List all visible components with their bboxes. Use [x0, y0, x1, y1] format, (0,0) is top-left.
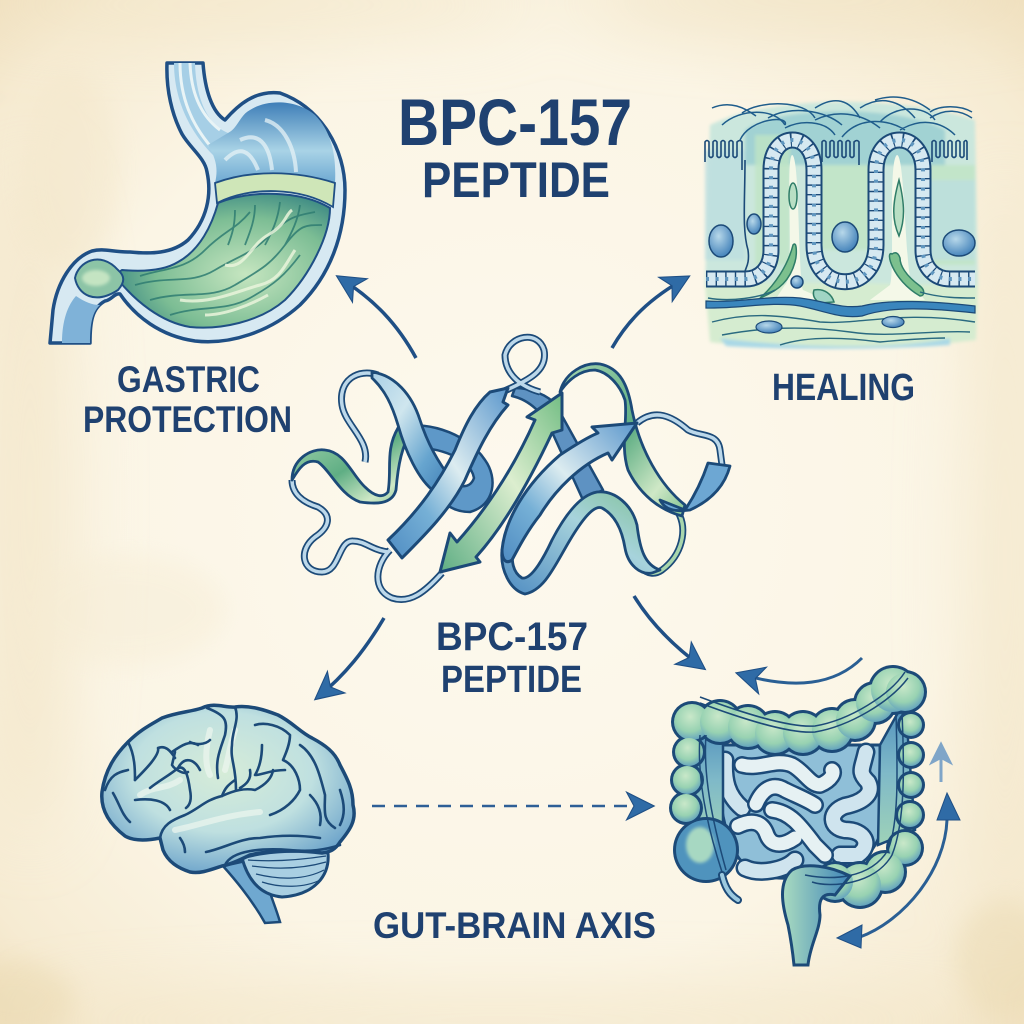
arrow: to stomach — [340, 278, 416, 358]
arrow: top of gut — [740, 658, 862, 683]
strand 2 green arrow — [440, 393, 562, 572]
green top ribbon — [560, 364, 685, 516]
arrow: double-headed right side of gut — [860, 820, 947, 937]
highlights — [140, 730, 260, 830]
upper chamber — [208, 102, 335, 183]
strand 3 blue arrow — [502, 423, 637, 562]
arrow: to gut — [634, 596, 702, 667]
label: gastric protection: PROTECTION — [83, 399, 292, 440]
loops — [292, 337, 722, 600]
strand 1 blue — [388, 388, 508, 558]
sulci — [105, 707, 344, 865]
icon: healing tissue — [705, 97, 978, 349]
crypt cell band — [706, 140, 975, 282]
back blue strand — [512, 388, 603, 500]
title: PEPTIDE — [422, 152, 610, 208]
icon: peptide ribbon — [292, 337, 730, 600]
lower ribbon — [502, 492, 660, 594]
descending inner wall — [878, 700, 915, 845]
label: gut-brain axis: GUT-BRAIN AXIS — [373, 905, 656, 946]
connective fibres — [708, 290, 975, 345]
green capillaries — [760, 180, 924, 303]
arrowhead: up — [937, 793, 960, 820]
microvilli — [705, 140, 967, 272]
arrowhead: down-left — [837, 925, 862, 948]
label: bpc-157 peptide center: BPC-157 — [436, 615, 588, 659]
icon: intestines — [669, 665, 927, 965]
band — [215, 173, 335, 207]
pyloric bulge — [75, 260, 123, 297]
arrow: pale upward — [940, 745, 942, 782]
left blue helix — [372, 372, 452, 492]
colon outline circles — [669, 665, 927, 909]
label: healing: HEALING — [772, 367, 915, 409]
top domes — [712, 97, 972, 140]
ascending inner wall — [690, 720, 723, 840]
duodenum shading — [62, 296, 100, 343]
back ring — [398, 425, 493, 512]
stomach outer wall — [50, 63, 345, 343]
arrow: to healing — [612, 278, 686, 348]
icon: brain — [102, 705, 354, 923]
esophagus shading — [174, 63, 228, 155]
label: gastric protection: GASTRIC — [117, 359, 260, 400]
cerebrum outline — [102, 705, 354, 873]
label: bpc-157 peptide center — [436, 615, 588, 701]
small intestine base — [718, 745, 880, 878]
appendix — [722, 875, 738, 900]
label: gastric protection — [83, 359, 292, 440]
cecum — [676, 820, 736, 880]
taenia lines — [699, 672, 908, 885]
arrow: to brain — [318, 618, 384, 697]
title — [398, 85, 632, 208]
right end arrow — [660, 463, 730, 511]
icon: stomach — [50, 63, 345, 343]
nuclei — [709, 214, 975, 288]
title: BPC-157 — [398, 85, 632, 159]
tissue wash — [705, 102, 978, 349]
cerebellum — [242, 851, 328, 897]
left green helix — [292, 428, 412, 503]
colon fill circles — [672, 668, 924, 906]
label: bpc-157 peptide center: PEPTIDE — [441, 659, 582, 701]
small intestine coils — [725, 752, 870, 871]
gastric mucosa — [119, 194, 330, 328]
blue vessel band — [706, 297, 975, 317]
rectum — [782, 866, 850, 965]
arrow: dashed brain to gut — [372, 805, 650, 807]
lumen pockets — [775, 155, 826, 300]
brain stem — [223, 860, 280, 923]
